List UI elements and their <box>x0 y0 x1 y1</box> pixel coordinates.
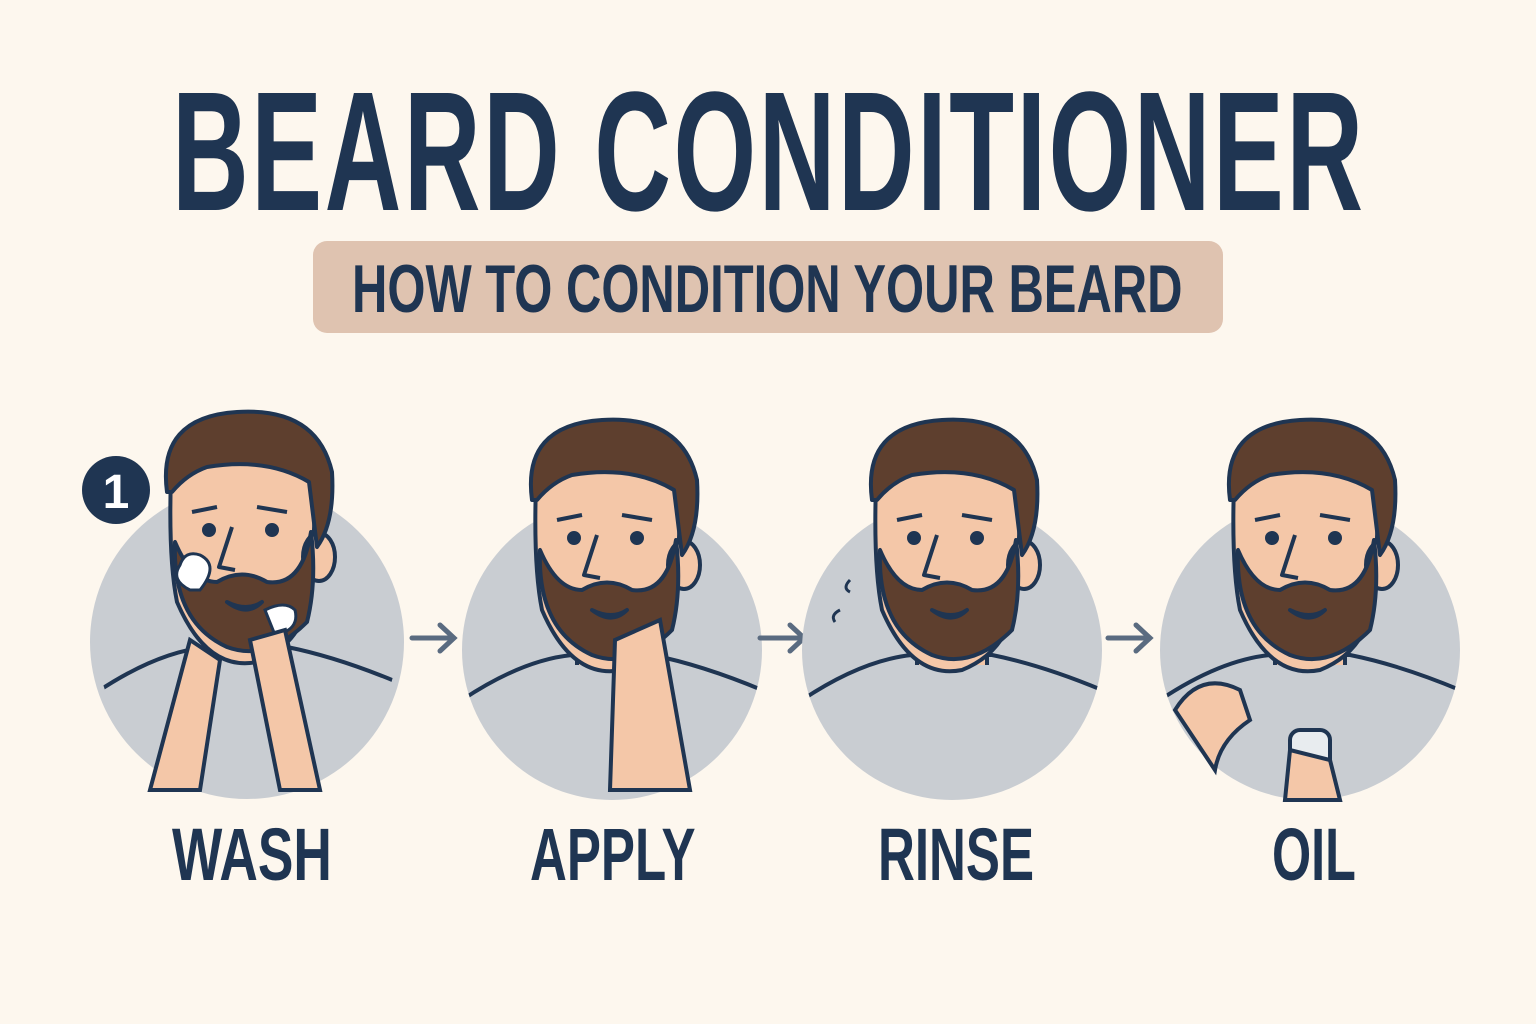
label: wash: WASH <box>172 813 332 896</box>
badge 1 <box>82 456 150 524</box>
label: oil: OIL <box>1272 813 1356 896</box>
arrow 3 <box>1108 625 1150 651</box>
step 4: oil <box>1160 420 1460 800</box>
steps illustration <box>82 410 1460 802</box>
label: apply: APPLY <box>530 813 696 896</box>
step 3: rinse <box>802 420 1102 800</box>
arrow 2 <box>760 625 804 651</box>
arrow 1 <box>412 625 454 651</box>
title: BEARD CONDITIONER <box>172 57 1366 247</box>
badge 1: 1 <box>103 466 129 519</box>
subtitle pill: HOW TO CONDITION YOUR BEARD <box>352 251 1183 327</box>
label: rinse: RINSE <box>878 813 1034 896</box>
step 2: apply <box>462 420 762 800</box>
step 1: wash <box>90 412 404 799</box>
